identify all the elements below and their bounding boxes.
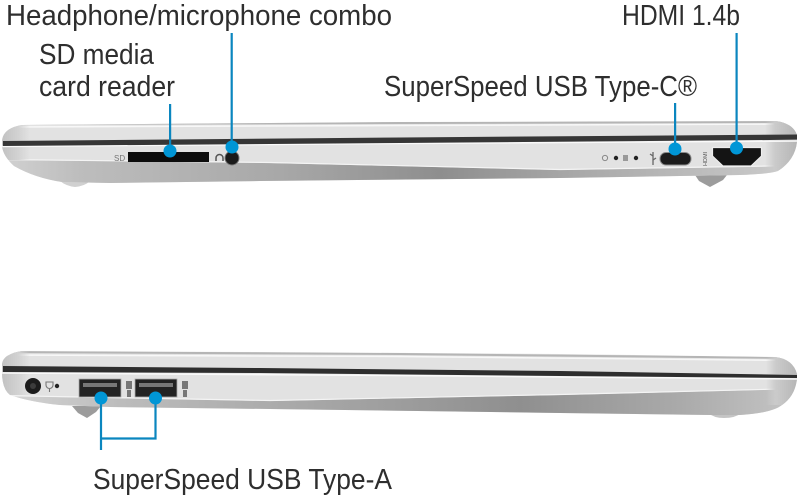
callout: SD media card reader [39,39,176,158]
USB-A port 2 [135,379,177,397]
HDMI label: HDMI [703,151,709,166]
callout: headphone/microphone combo: Headphone/microphone combo [6,0,392,32]
status indicators [602,155,638,161]
headphone jack [225,151,239,165]
SD label: SD [114,154,125,163]
usb icon [650,152,656,165]
callout: SuperSpeed USB Type-A [93,392,393,496]
right foot [695,175,727,187]
callout: headphone/microphone combo [6,0,392,154]
USB-A port 1 [79,379,121,397]
callout: SuperSpeed USB Type-C: SuperSpeed USB Type-C® [384,71,697,103]
power jack [25,378,41,394]
hinge line [3,134,797,146]
USB-C port [660,152,691,165]
USB 3 icons [126,381,188,397]
power LED [55,384,59,388]
HDMI port [712,148,762,166]
chassis body [2,121,797,183]
power icon [46,382,53,392]
callout: SuperSpeed USB Type-C [384,71,697,156]
headphone icon [216,155,223,161]
left foot [60,181,90,187]
left foot [72,406,101,418]
callout: SD media card reader: card reader [39,71,175,103]
callout: SD media card reader: SD media [39,39,155,71]
laptop: right side view [0,118,800,190]
chassis body [2,351,797,415]
SD card slot [128,152,209,162]
callout: SuperSpeed USB Type-A: SuperSpeed USB Type-A [93,464,393,496]
callout: HDMI 1.4b [622,0,743,154]
right foot [708,413,742,418]
laptop: left side view [0,348,800,420]
callout: HDMI 1.4b: HDMI 1.4b [622,0,740,32]
hinge line [3,366,797,378]
